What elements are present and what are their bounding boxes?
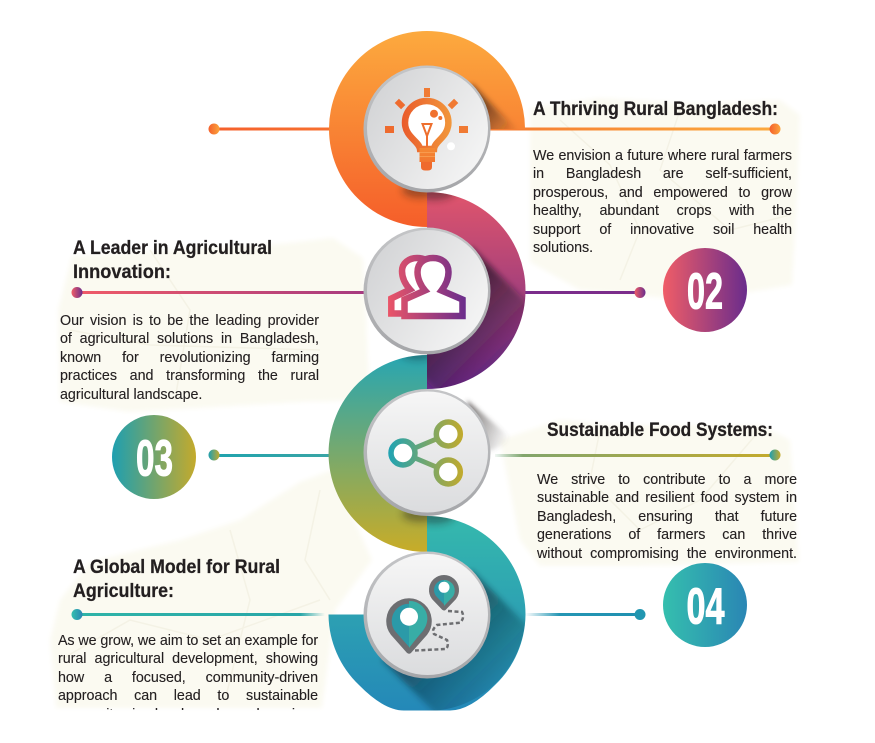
disc 3: [364, 389, 490, 516]
ribbon: teal to olive segment: [329, 355, 427, 552]
text block: We envision a future where rural farmers: [533, 148, 792, 164]
text block: how a focused, community-driven: [58, 670, 318, 686]
text block: Our vision is to be the leading provider: [60, 313, 319, 329]
icon: share nodes: [391, 422, 460, 484]
text block: [537, 472, 797, 562]
heading: Innovation:: [73, 262, 171, 283]
panel: A Global Model for Rural Agriculture: [58, 557, 318, 710]
badge: 02: 02: [687, 262, 723, 320]
badge: 03: [112, 415, 196, 499]
disc 4: [364, 552, 490, 678]
text block: As we grow, we aim to set an example for: [58, 633, 318, 649]
text block: known for revolutionizing farming: [60, 350, 319, 366]
text block: We strive to contribute to a more: [537, 472, 797, 488]
badge: 04: 04: [686, 578, 725, 634]
heading: [73, 238, 272, 283]
shadow on white beside third disc: [467, 400, 513, 451]
text block: [58, 633, 318, 710]
text block: in Bangladesh are self-sufficient,: [533, 166, 792, 182]
connector: third row: [208, 450, 780, 460]
connector: second row: [72, 287, 646, 298]
text block: Bangladesh, ensuring that future: [537, 509, 797, 525]
heading: [73, 557, 280, 602]
shadow on teal to olive segment: [399, 355, 427, 526]
text block: approach can lead to sustainable: [58, 688, 318, 704]
disc 1: [364, 66, 490, 192]
icon: two people: [391, 258, 462, 316]
text block: solutions.: [533, 240, 593, 256]
ribbon: orange segment: [329, 31, 525, 227]
text block: sustainable and resilient food system in: [537, 490, 797, 506]
text block: [60, 313, 319, 403]
panel: A Leader in Agricultural Innovation: [60, 238, 319, 403]
infographic: central ribbon and connectors: [72, 31, 780, 710]
connector: top row: [208, 124, 780, 134]
shadow on purple segment: [427, 192, 525, 389]
text block: of agricultural solutions in Bangladesh,: [60, 331, 319, 347]
badge: 02: [663, 248, 747, 332]
icon: map pins and route: [389, 577, 463, 651]
ribbon: teal to blue segment: [328, 516, 526, 710]
heading: Agriculture:: [73, 581, 174, 602]
text block: [533, 148, 792, 256]
badge: 04: [663, 563, 747, 647]
disc 2: [364, 228, 490, 354]
text block: support of innovative soil health: [533, 222, 792, 238]
shadow on teal to blue segment: [380, 516, 525, 710]
text block: generations of farmers can thrive: [537, 527, 797, 543]
text block: practices and transforming the rural: [60, 368, 319, 384]
text block: rural agricultural development, showing: [58, 651, 318, 667]
text block: without compromising the environment.: [537, 546, 797, 562]
panel: A Thriving Rural Bangladesh: [533, 99, 792, 256]
text block: healthy, abundant crops with the: [533, 203, 792, 219]
text block: agricultural landscape.: [60, 387, 202, 403]
shadow on orange segment: [402, 84, 540, 198]
badge: 03: 03: [136, 430, 173, 486]
panel: Sustainable Food Systems: [537, 420, 797, 562]
text block: prosperous, and empowered to grow: [533, 185, 792, 201]
connector: fourth row: [72, 609, 646, 620]
ribbon: purple segment: [427, 192, 526, 389]
icon: light bulb: [385, 88, 468, 170]
